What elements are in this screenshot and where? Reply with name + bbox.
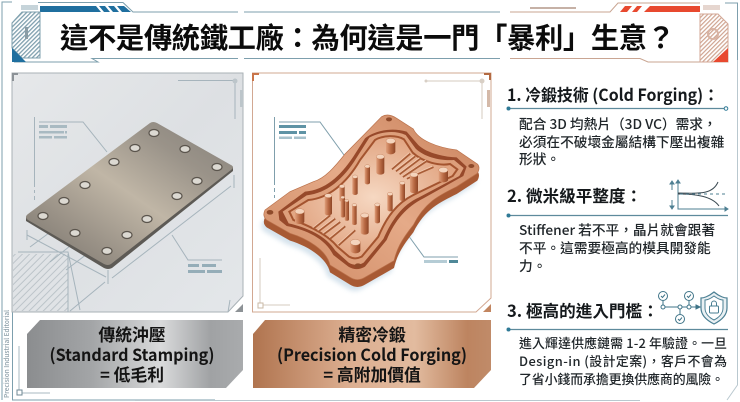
body: Design-in (設計定案)，客戶不會為	[519, 351, 727, 370]
section 2: flatness	[506, 180, 728, 275]
side wall	[264, 122, 479, 287]
body: 不平。這需要極高的模具開發能	[519, 237, 711, 257]
title banner	[12, 2, 728, 62]
body	[519, 219, 715, 275]
heading: 2. 微米級平整度：	[507, 183, 642, 207]
divider	[506, 106, 728, 110]
label: precision cold forging: = 高附加價值	[323, 362, 421, 386]
body: 必須在不破壞金屬結構下壓出複雜	[519, 131, 725, 151]
label: standard stamping: 傳統沖壓	[98, 322, 166, 346]
screw holes	[267, 117, 474, 268]
inner rim	[283, 132, 464, 265]
panel: precision forging	[252, 73, 491, 312]
section 3: entry barrier	[506, 292, 728, 388]
fins	[313, 153, 433, 245]
hatched drawing corner	[13, 254, 68, 311]
pocket wall	[278, 130, 467, 269]
body	[519, 333, 727, 388]
bottom-left drafting mark	[17, 346, 50, 395]
copper stiffener part	[261, 115, 479, 291]
body: 了省小錢而承擔更換供應商的風險。	[519, 369, 724, 388]
label: precision cold forging: 精密冷鍛	[338, 322, 406, 346]
body: 形狀。	[519, 148, 560, 168]
panel: traditional stamping	[12, 73, 243, 312]
body: 配合 3D 均熱片（3D VC）需求，	[519, 113, 717, 133]
label: precision cold forging: (Precision Cold Forging)	[277, 342, 467, 366]
label: standard stamping: (Standard Stamping)	[50, 342, 214, 366]
section 1: cold forging	[506, 82, 728, 168]
vertical edge label: Precision Industrial Editorial	[1, 310, 11, 398]
panel background	[12, 73, 243, 312]
drafting lines	[18, 80, 235, 312]
banner frame and ornaments	[12, 2, 728, 62]
left hatch block	[12, 12, 40, 58]
icon: shield lock	[701, 292, 727, 324]
icon: validation network	[658, 292, 700, 324]
icon: flatness chart	[670, 180, 728, 211]
heading: 1. 冷鍛技術 (Cold Forging)：	[507, 82, 719, 106]
body	[519, 113, 725, 168]
label: precision cold forging	[253, 320, 491, 388]
right hatch block	[700, 14, 728, 62]
pocket floor	[289, 136, 457, 258]
heading: 3. 極高的進入門檻：	[507, 298, 659, 322]
body: 進入輝達供應鏈需 1-2 年驗證。一旦	[519, 333, 727, 352]
body: Stiffener 若不平，晶片就會跟著	[519, 219, 715, 239]
steel plate	[26, 122, 233, 269]
body: 力。	[519, 255, 546, 275]
top face	[264, 115, 479, 280]
panel border	[252, 73, 491, 312]
divider	[506, 214, 728, 218]
pins	[295, 142, 448, 253]
drafting lines and callouts	[260, 81, 482, 305]
divider	[506, 328, 728, 332]
label: standard stamping	[27, 320, 243, 388]
label: standard stamping: = 低毛利	[100, 362, 164, 386]
title text: 這不是傳統鐵工廠：為何這是一門「暴利」生意？	[60, 16, 675, 57]
